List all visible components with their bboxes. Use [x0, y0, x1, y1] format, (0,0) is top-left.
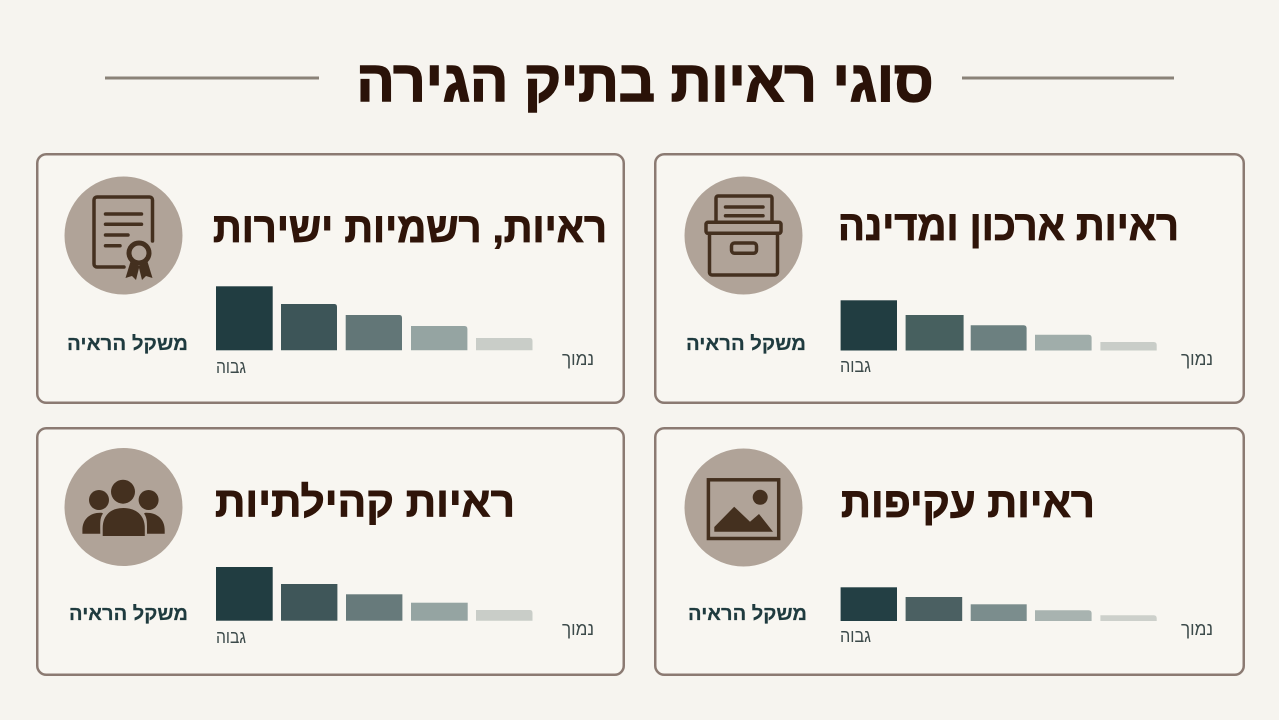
bar chart [841, 587, 1157, 621]
icon: certificate document [64, 176, 182, 294]
heading: ראיות קהילתיות [215, 478, 515, 526]
title: סוגי ראיות בתיק הגירה [356, 49, 934, 114]
heading: ראיות ארכון ומדינה [838, 202, 1179, 249]
icon: archive box [684, 176, 802, 294]
panel: archive and state evidence [655, 154, 1244, 403]
label: low: נמוך [1181, 619, 1213, 639]
label: low: נמוך [562, 619, 594, 639]
label: low: נמוך [562, 349, 594, 369]
label: evidence weight: משקל הראיה [69, 603, 188, 625]
bar chart [216, 286, 532, 350]
label: low: נמוך [1181, 349, 1213, 369]
label: high: גבוה [216, 357, 246, 377]
panel: official direct evidence [37, 154, 624, 403]
panel: community evidence [37, 428, 624, 675]
label: high: גבוה [216, 627, 246, 647]
label: high: גבוה [840, 626, 871, 646]
label: high: גבוה [840, 356, 871, 376]
label: evidence weight: משקל הראיה [686, 333, 806, 355]
bar chart [216, 567, 532, 621]
heading: ראיות עקיפות [841, 479, 1095, 526]
label: evidence weight: משקל הראיה [688, 603, 807, 625]
icon: group of people [64, 448, 182, 566]
label: evidence weight: משקל הראיה [67, 333, 188, 355]
heading: ראיות, רשמיות ישירות [213, 204, 607, 251]
bar chart [841, 300, 1157, 350]
panel: circumstantial evidence [655, 428, 1244, 675]
icon: framed picture [684, 448, 802, 566]
